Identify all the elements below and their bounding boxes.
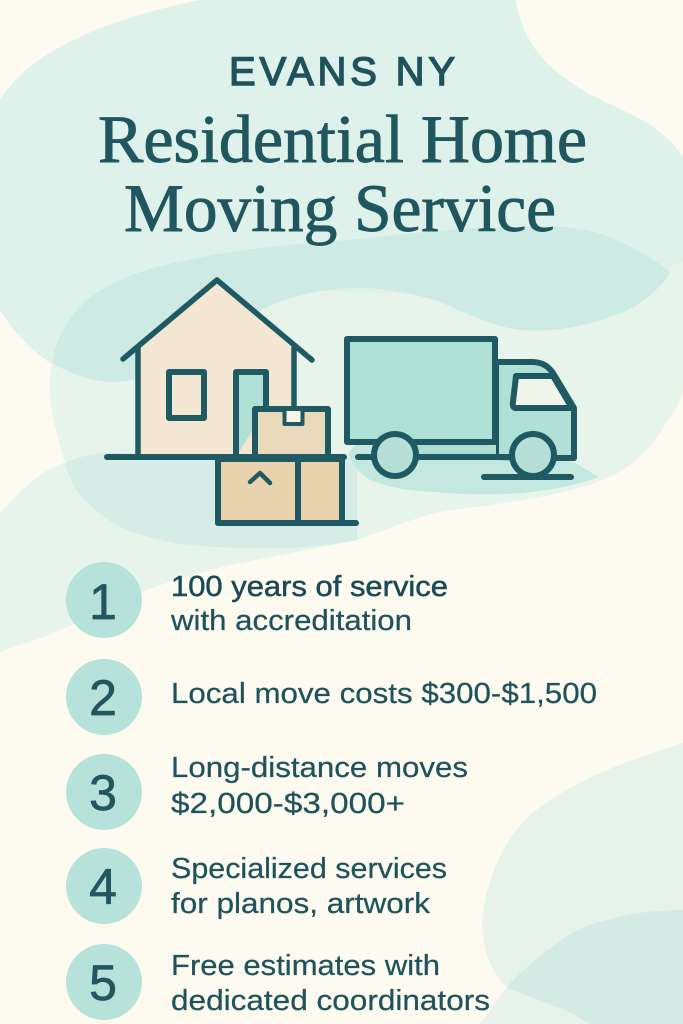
ground line	[107, 454, 344, 460]
title	[98, 101, 587, 246]
list item 3	[66, 752, 468, 830]
cab	[496, 362, 574, 458]
cargo box	[347, 339, 495, 442]
title: Residential Home	[98, 101, 587, 177]
number 4: 4	[89, 859, 117, 915]
floor line	[218, 520, 356, 526]
badge 3	[66, 754, 142, 830]
house body	[138, 281, 294, 457]
number 1: 1	[89, 574, 117, 630]
background blob: teal pool under the house	[65, 453, 357, 548]
badge 1	[66, 562, 142, 638]
under-cargo fill	[372, 443, 496, 457]
list item 1: with accreditation	[170, 605, 412, 637]
illustration: truck	[347, 339, 574, 477]
lower box arrow	[250, 473, 270, 483]
list item 2	[66, 659, 597, 735]
number 3: 3	[89, 765, 117, 821]
roof	[123, 280, 312, 360]
rear wheel	[374, 434, 416, 476]
item 2 text: Local move costs $300-$1,500	[171, 678, 597, 710]
heading: location: EVANS NY	[229, 50, 455, 94]
list item 5: dedicated coordinators	[171, 985, 490, 1017]
badge 2	[66, 659, 142, 735]
front wheel	[512, 434, 554, 476]
badge 5	[66, 944, 142, 1020]
cab window	[513, 376, 572, 408]
number 5: 5	[89, 955, 117, 1011]
background blob: top mint	[0, 0, 683, 400]
illustration: stacked boxes	[218, 409, 356, 523]
upper box	[255, 409, 328, 457]
chassis	[358, 454, 510, 460]
lower box divider	[295, 459, 301, 523]
list item 5	[66, 944, 490, 1020]
background blob: bottom right light	[480, 743, 683, 1024]
list item 4: for planos, artwork	[171, 888, 431, 920]
lower box	[218, 459, 342, 523]
badge 4	[66, 848, 142, 924]
background blob: centre teal band	[52, 226, 670, 382]
list item 1	[66, 562, 448, 638]
item 4 text: Specialized services	[171, 853, 447, 885]
house walls	[138, 348, 294, 457]
upper box tape	[284, 411, 302, 424]
background blob: truck shadow	[348, 440, 599, 494]
item 1 text: 100 years of service	[171, 571, 448, 603]
number 2: 2	[89, 670, 117, 726]
window	[169, 372, 204, 418]
list item 3: $2,000-$3,000+	[171, 788, 405, 820]
road line	[484, 474, 571, 480]
title: Moving Service	[124, 170, 556, 246]
door	[236, 372, 266, 457]
background blob: bottom right teal	[507, 910, 683, 1024]
background blob: lower light mint	[0, 262, 683, 653]
item 3 text: Long-distance moves	[171, 752, 468, 784]
illustration: house	[107, 280, 344, 457]
list item 4	[66, 848, 447, 924]
item 5 text: Free estimates with	[171, 950, 440, 982]
